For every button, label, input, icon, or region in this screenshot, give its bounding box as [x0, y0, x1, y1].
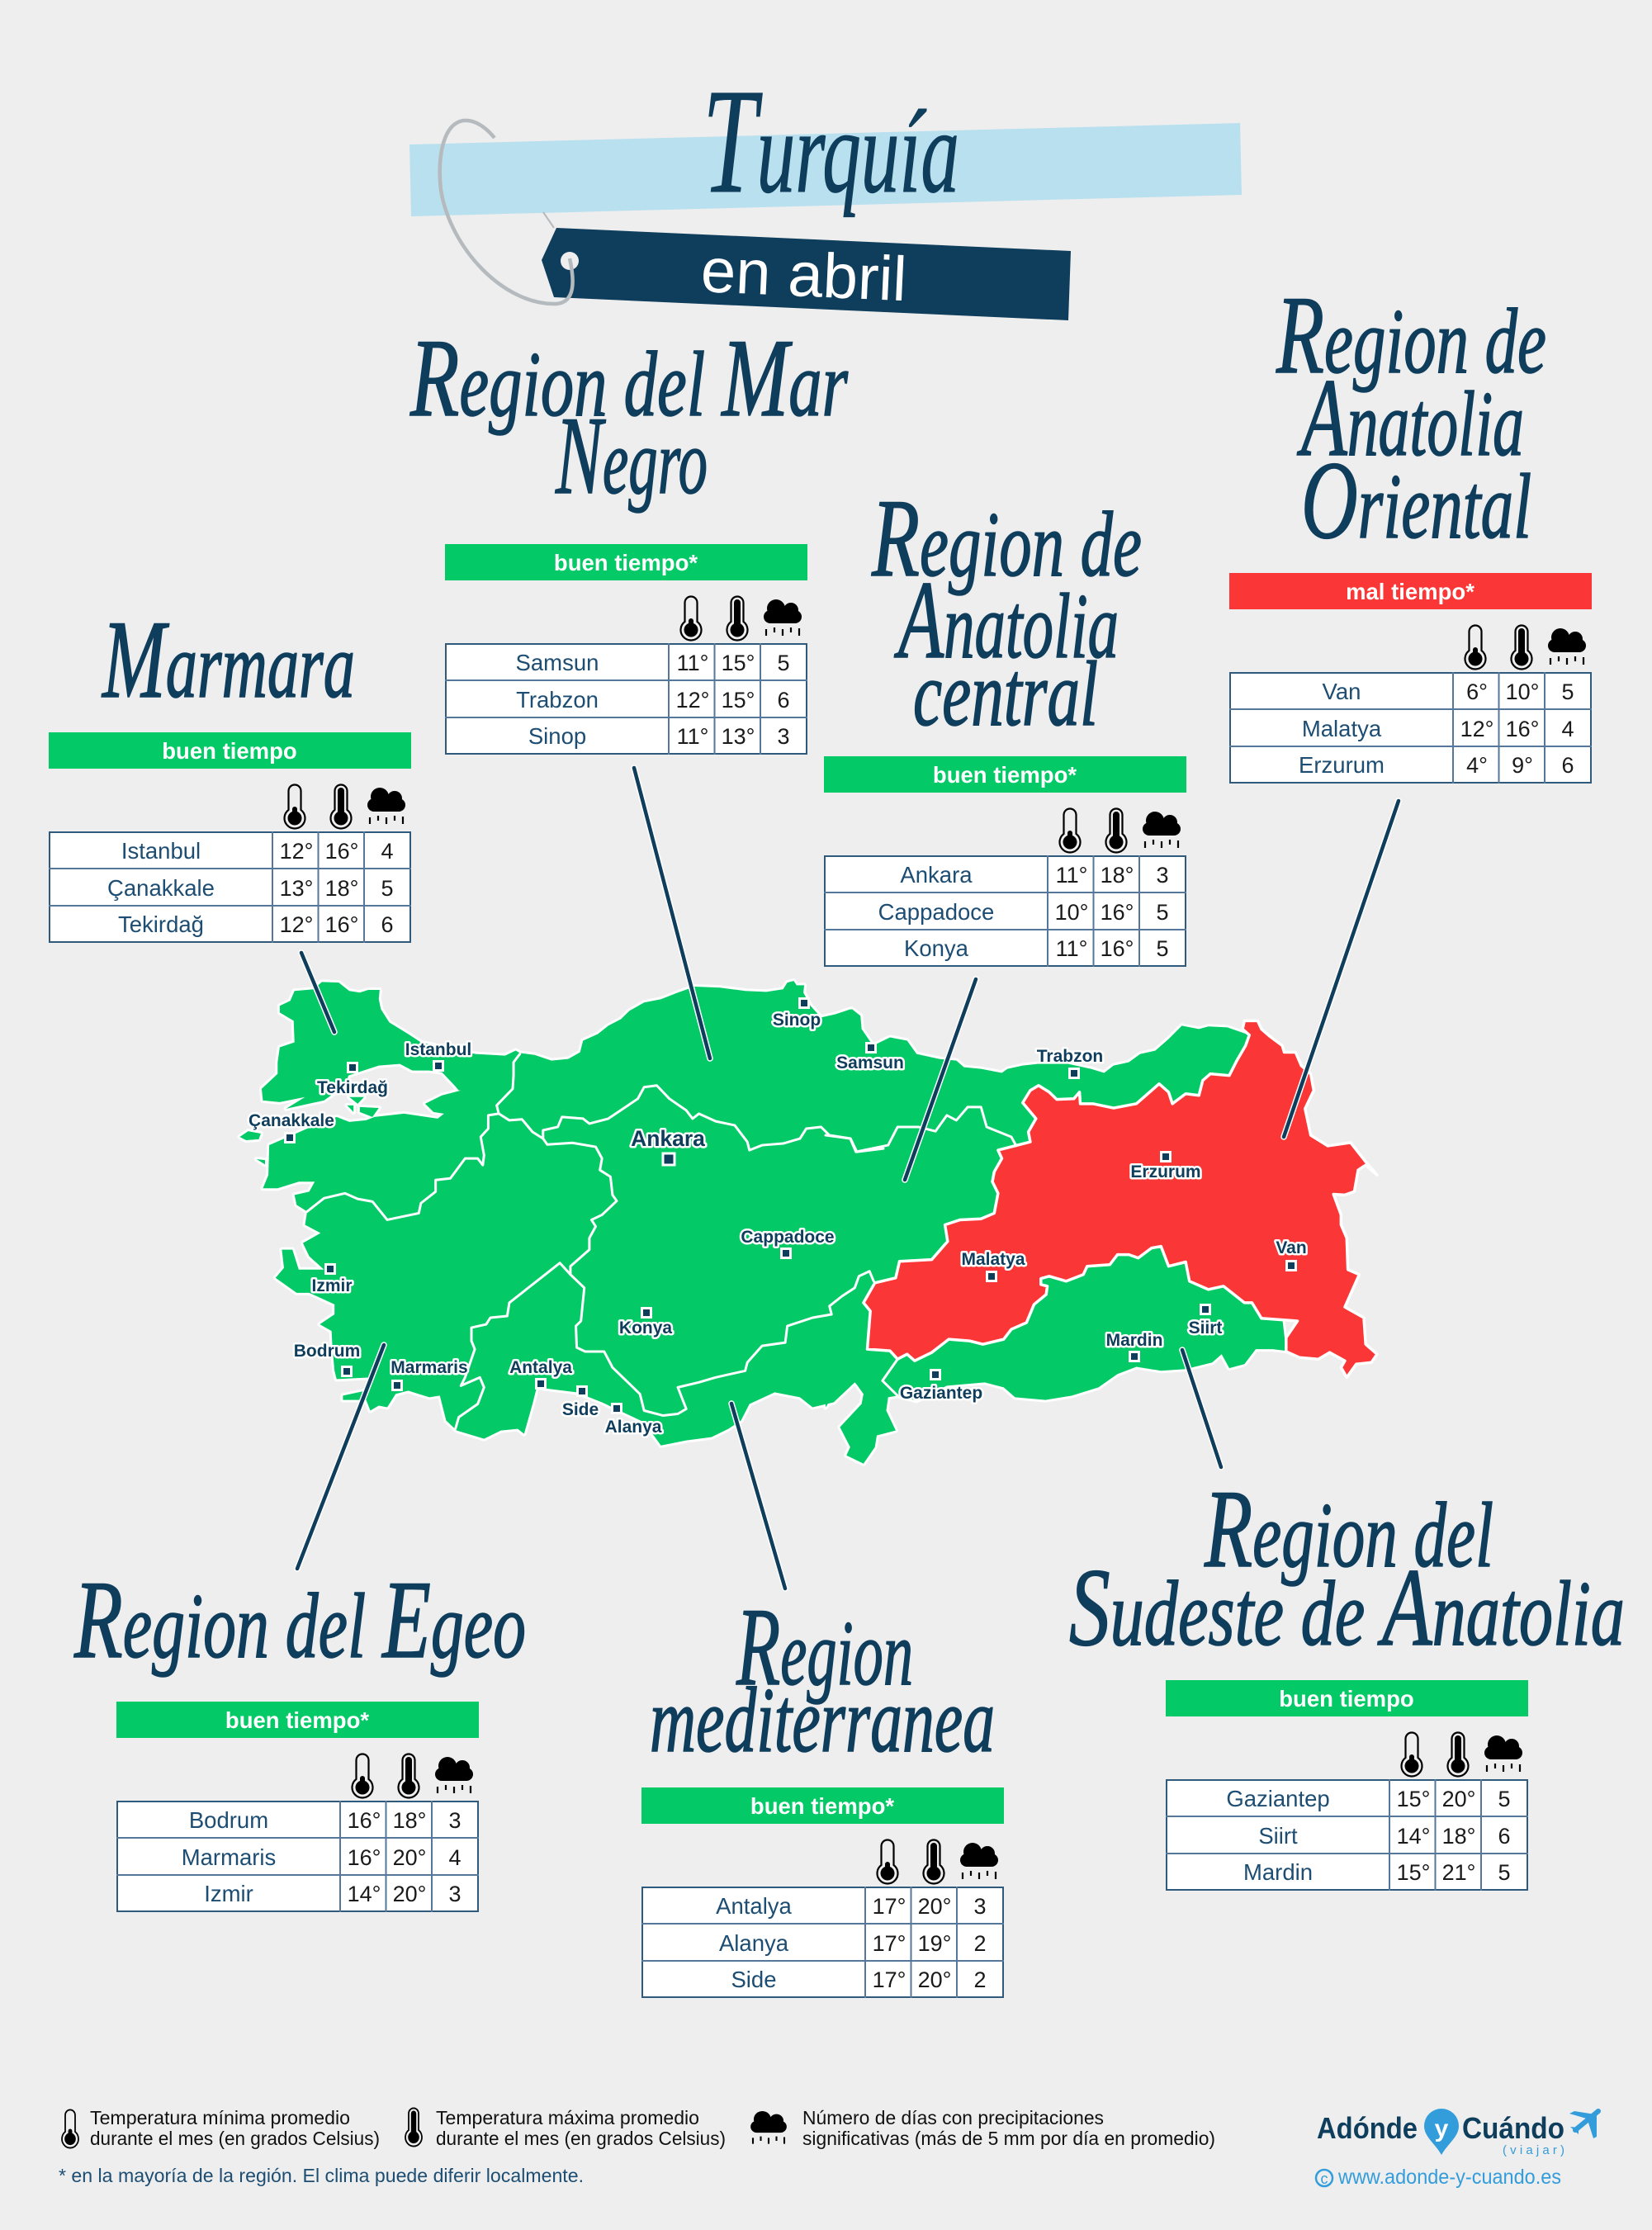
data table: 11° [677, 651, 708, 675]
website url: www.adonde-y-cuando.es [1337, 2166, 1561, 2189]
icon: airplane [1569, 2111, 1598, 2138]
data table: 6 [381, 912, 394, 937]
data table: 5 [1156, 936, 1169, 961]
map city labels: Istanbul [405, 1040, 471, 1059]
map city labels: Ankara [631, 1126, 705, 1151]
map coast outline [239, 981, 1286, 1464]
legend text: rain days: Número de días con precipitaciones [802, 2107, 1104, 2128]
map city labels [249, 1011, 1307, 1437]
icon: map pin with y: y [1435, 2115, 1449, 2142]
data table: Izmir [204, 1881, 253, 1906]
data table [641, 1887, 1004, 1998]
data table: Marmaris [182, 1844, 276, 1870]
panel: Anatolia central [824, 477, 1186, 967]
data table: 12° [280, 912, 313, 937]
map city markers [286, 999, 1296, 1413]
data table: 13° [722, 724, 755, 749]
data table: 17° [873, 1894, 906, 1919]
data table: 5 [1498, 1860, 1511, 1885]
map city labels: Tekirdağ [317, 1078, 388, 1097]
footnote: * en la mayoría de la región. El clima puede diferir localmente. [59, 2165, 584, 2186]
heading: Region de Anatolia central: central [913, 643, 1098, 746]
heading: Region del Sudeste de Anatolia: Region del [1204, 1468, 1493, 1591]
weather bar [641, 1787, 1004, 1824]
map city labels: Side [562, 1400, 599, 1419]
weather bar: buen tiempo [1279, 1686, 1414, 1712]
legend text: rain days [802, 2107, 1215, 2149]
data table [1229, 672, 1592, 784]
map city labels: Marmaris [391, 1358, 468, 1377]
weather bar: mal tiempo* [1346, 579, 1474, 604]
logo word: Cuándo: Cuándo [1462, 2111, 1564, 2145]
legend text: min temperature: Temperatura mínima promedio [90, 2107, 350, 2128]
data table: 4 [448, 1845, 462, 1870]
data table: Erzurum [1299, 752, 1385, 778]
panel: Egeo [73, 1559, 526, 1912]
data table: 20° [393, 1845, 426, 1870]
heading: Region de Anatolia Oriental: Oriental [1301, 439, 1531, 562]
data table: 10° [1055, 900, 1088, 925]
map city labels: Erzurum [1130, 1162, 1201, 1181]
data table: 4 [1561, 717, 1574, 741]
map city labels: Sinop [773, 1011, 821, 1030]
map city labels: Van [1276, 1238, 1307, 1257]
data table: 12° [676, 688, 709, 713]
data table: 11° [677, 724, 708, 749]
weather bar [1229, 573, 1592, 609]
data table [49, 831, 411, 943]
data table: Alanya [719, 1930, 789, 1956]
legend text: max temperature [436, 2107, 726, 2149]
data table: 11° [1056, 863, 1087, 888]
data table: 16° [325, 912, 358, 937]
subtitle: en abril: en abril [699, 235, 908, 315]
data table: 5 [381, 876, 394, 901]
data table: 16° [325, 839, 358, 864]
data table: 16° [1101, 900, 1134, 925]
data table: 21° [1442, 1860, 1475, 1885]
data table: 4 [381, 839, 394, 864]
legend text: min temperature [90, 2107, 380, 2149]
data table: Antalya [716, 1893, 793, 1919]
data table: Side [731, 1967, 777, 1992]
data table: Tekirdağ [118, 911, 204, 937]
data table: 5 [1498, 1787, 1511, 1811]
data table: Mardin [1243, 1859, 1313, 1885]
weather bar: buen tiempo* [750, 1793, 894, 1819]
data table: 4° [1466, 753, 1488, 778]
map of Turkey [239, 981, 1377, 1464]
data table: 5 [1156, 900, 1169, 925]
weather bar: buen tiempo* [933, 762, 1077, 788]
icon: min temperature, max temperature, rain [1402, 1732, 1522, 1777]
heading: Region de Anatolia Oriental: Anatolia [1297, 357, 1524, 480]
data table: 15° [722, 651, 755, 675]
map city labels: Malatya [961, 1250, 1025, 1269]
tag hole and cord [440, 121, 579, 304]
heading: Region de Anatolia central: Anatolia [894, 559, 1119, 682]
red region: Anatolia Oriental [864, 1020, 1377, 1377]
data table: 16° [348, 1845, 381, 1870]
data table: 9° [1512, 753, 1533, 778]
heading: Region de Anatolia Oriental: Region de [1276, 274, 1546, 397]
light blue band [409, 123, 1242, 216]
icon: min temperature, max temperature, rain [680, 596, 802, 641]
data table: Bodrum [189, 1807, 268, 1833]
data table: 18° [393, 1808, 426, 1833]
logo word: Adónde: Adónde [1317, 2111, 1418, 2145]
logo: Adónde y Cuándo [1316, 2109, 1598, 2189]
map city labels: Samsun [836, 1053, 904, 1072]
leader lines from tables to map [297, 768, 1399, 1588]
data table: 3 [777, 724, 790, 749]
data table: 17° [873, 1931, 906, 1956]
data table: Sinop [528, 723, 586, 749]
data table: 10° [1506, 679, 1539, 704]
heading: Region del Sudeste de Anatolia [1069, 1468, 1625, 1669]
data table: 20° [918, 1894, 951, 1919]
heading: Region de Anatolia central [871, 477, 1142, 746]
weather bar [1166, 1680, 1528, 1716]
data table: 11° [1056, 936, 1087, 961]
data table: 12° [1460, 717, 1493, 741]
title: Turquía: Turquía [703, 59, 959, 225]
green regions [239, 981, 1286, 1464]
data table: 15° [1397, 1787, 1430, 1811]
legend text: min temperature: durante el mes (en grados Celsius) [90, 2128, 380, 2149]
data table: 14° [1397, 1824, 1430, 1849]
panel: Marmara [49, 599, 411, 943]
map city labels: Alanya [605, 1418, 662, 1437]
data table: 16° [1506, 717, 1539, 741]
data table [824, 855, 1186, 967]
map city labels: Siirt [1189, 1319, 1222, 1338]
icon: map pin with y [1424, 2109, 1459, 2155]
icon: min temperature, max temperature, rain [284, 784, 405, 829]
data table: Istanbul [121, 838, 201, 864]
icon: min temperature, max temperature, rain [877, 1839, 998, 1884]
map city labels: Gaziantep [900, 1384, 982, 1403]
weather table group [49, 732, 411, 943]
heading: Region de Anatolia Oriental [1276, 274, 1546, 562]
data table: 3 [448, 1808, 462, 1833]
data table: 5 [1561, 679, 1574, 704]
map city labels: Bodrum [294, 1342, 360, 1361]
weather table group [445, 544, 807, 755]
panel: Sudeste de Anatolia [1069, 1468, 1625, 1891]
data table: 5 [777, 651, 790, 675]
data table: 16° [348, 1808, 381, 1833]
data table: 2 [973, 1931, 987, 1956]
data table: 13° [280, 876, 313, 901]
copyright symbol: c [1321, 2171, 1328, 2187]
data table: 16° [1101, 936, 1134, 961]
data table: 20° [918, 1967, 951, 1992]
data table: 6 [1561, 753, 1574, 778]
data table: Konya [904, 935, 969, 961]
copyright symbol [1316, 2170, 1332, 2187]
data table: Samsun [516, 650, 599, 675]
map city labels: Izmir [311, 1276, 353, 1295]
data table: Trabzon [516, 687, 599, 713]
data table: Çanakkale [107, 875, 215, 901]
weather bar [824, 756, 1186, 793]
icon: min temperature, max temperature, rain [352, 1754, 473, 1798]
weather bar: buen tiempo [162, 738, 297, 764]
panel: Mediterránea [641, 1586, 1004, 1998]
data table: 19° [918, 1931, 951, 1956]
data table: 15° [722, 688, 755, 713]
dark luggage tag [542, 228, 1071, 320]
data table: Gaziantep [1226, 1786, 1330, 1811]
icon: min temperature legend [62, 2109, 78, 2148]
heading: Region del Mar Negro: Negro [555, 395, 708, 518]
data table: Cappadoce [878, 899, 994, 925]
legend text: max temperature: Temperatura máxima promedio [436, 2107, 699, 2128]
data table: Malatya [1302, 716, 1382, 741]
panel: Anatolia Oriental [1229, 274, 1592, 784]
heading: Region del Mar Negro [409, 317, 848, 518]
data table: 6 [1498, 1824, 1511, 1849]
weather bar [445, 544, 807, 580]
data table: 3 [1156, 863, 1169, 888]
map city labels: Antalya [509, 1358, 572, 1377]
icon: max temperature legend [405, 2108, 422, 2147]
weather bar [49, 732, 411, 769]
map city labels: Cappadoce [741, 1228, 835, 1247]
data table: 6° [1466, 679, 1488, 704]
title banner: Turquía en abril [409, 59, 1242, 320]
data table: Van [1323, 679, 1361, 704]
heading: Marmara: Marmara [102, 599, 355, 722]
heading: Region de Anatolia central: Region de [871, 477, 1142, 600]
legend text: max temperature: durante el mes (en grados Celsius) [436, 2128, 726, 2149]
data table: 18° [1442, 1824, 1475, 1849]
legend [59, 2107, 1215, 2186]
data table: 3 [448, 1882, 462, 1906]
weather table group [824, 756, 1186, 967]
data table: 17° [873, 1967, 906, 1992]
heading: Region del Egeo: Region del Egeo [73, 1559, 526, 1682]
data table [116, 1801, 479, 1912]
weather table group [116, 1702, 479, 1912]
heading: Region del Mar Negro: Region del Mar [409, 317, 848, 440]
data table: 18° [325, 876, 358, 901]
logo tagline: viajar: (viajar) [1503, 2143, 1564, 2157]
data table: 12° [280, 839, 313, 864]
panel: Mar Negro [409, 317, 848, 755]
data table: 18° [1101, 863, 1134, 888]
legend text: rain days: significativas (más de 5 mm por día en promedio) [802, 2128, 1215, 2149]
icon: min temperature, max temperature, rain [1060, 809, 1181, 852]
weather bar [116, 1702, 479, 1738]
data table: 3 [973, 1894, 987, 1919]
icon: rain legend [750, 2111, 787, 2144]
map city labels: Konya [619, 1319, 672, 1338]
weather table group [1166, 1680, 1528, 1891]
heading: Region mediterranea: mediterranea [650, 1669, 995, 1772]
data table: 20° [393, 1882, 426, 1906]
data table: 2 [973, 1967, 987, 1992]
weather bar: buen tiempo* [225, 1707, 369, 1733]
icon: min temperature, max temperature, rain [1465, 626, 1586, 669]
data table: 14° [348, 1882, 381, 1906]
map city labels: Çanakkale [249, 1111, 334, 1130]
data table: 20° [1442, 1787, 1475, 1811]
data table: 6 [777, 688, 790, 713]
weather bar: buen tiempo* [554, 550, 698, 575]
data table: Siirt [1258, 1823, 1298, 1849]
region borders [307, 1054, 1016, 1429]
heading: Region mediterranea: Region [736, 1586, 913, 1709]
weather table group [641, 1787, 1004, 1998]
heading: Region mediterranea [650, 1586, 995, 1772]
data table [1166, 1779, 1528, 1891]
data table: 15° [1397, 1860, 1430, 1885]
weather table group [1229, 573, 1592, 784]
map city labels: Mardin [1106, 1331, 1162, 1350]
data table [445, 643, 807, 755]
data table: Ankara [900, 862, 973, 888]
map city labels: Trabzon [1037, 1047, 1103, 1066]
